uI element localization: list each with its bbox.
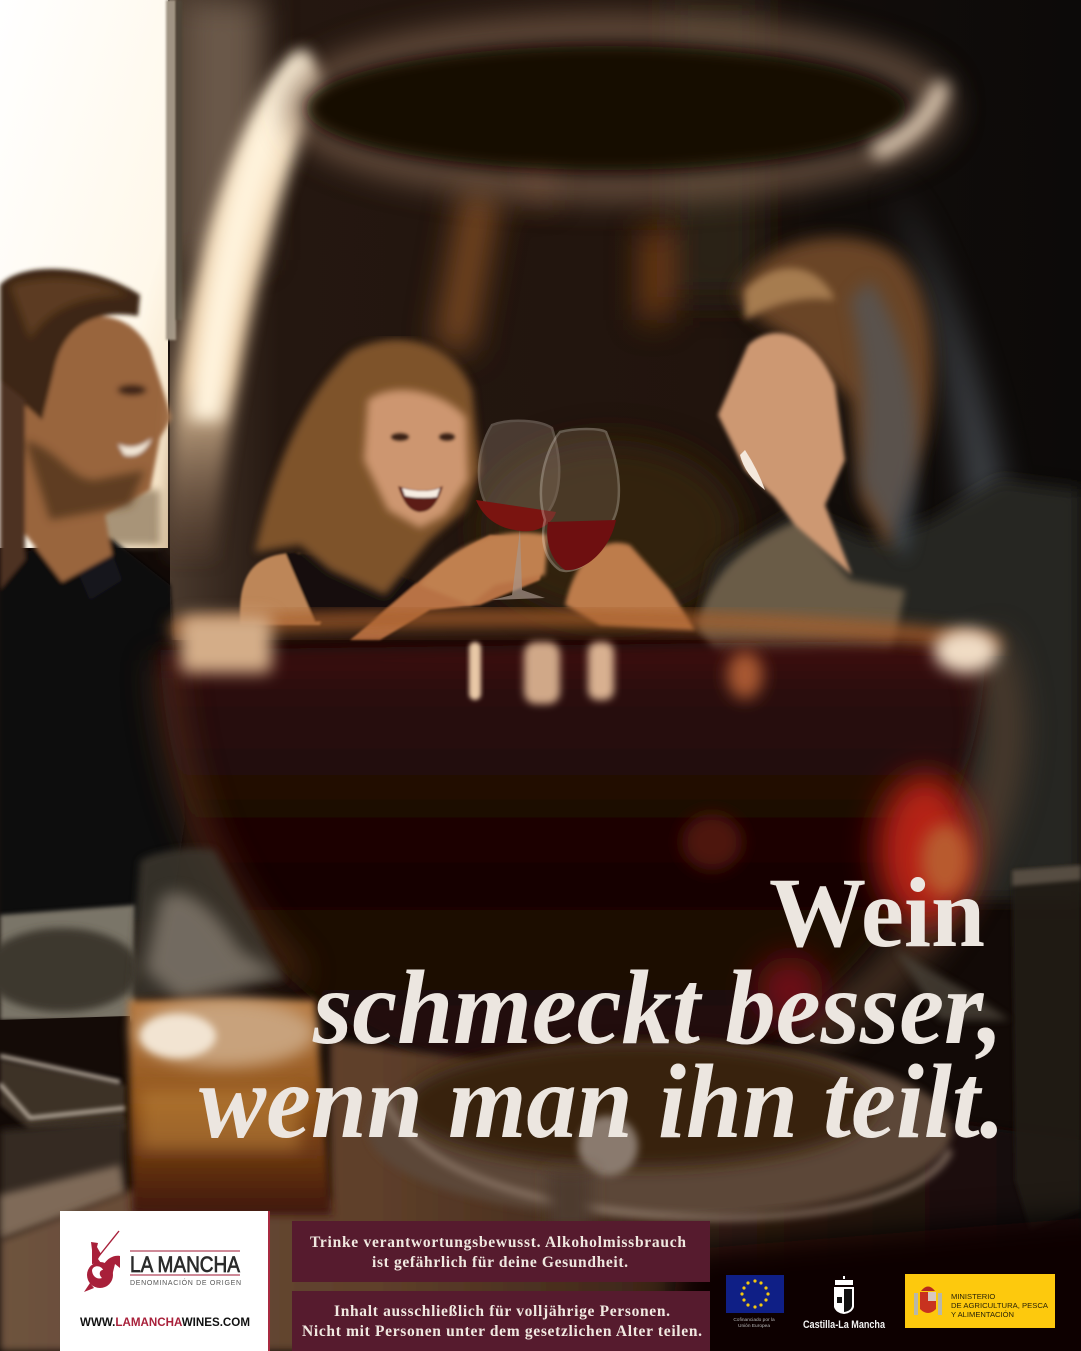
warning box: responsible drinking: ist gefährlich für deine Gesundheit. bbox=[372, 1254, 628, 1271]
headline: wenn man ihn teilt. bbox=[199, 1043, 1005, 1160]
headline bbox=[199, 857, 1005, 1160]
warning box: adults only: Nicht mit Personen unter dem gesetzlichen Alter teilen. bbox=[302, 1323, 702, 1340]
text: website: WWW.LAMANCHAWINES.COM bbox=[80, 1317, 250, 1329]
text: La Mancha wordmark: LA MANCHA bbox=[130, 1252, 240, 1277]
logo: Ministerio de Agricultura: MINISTERIO bbox=[951, 1292, 995, 1301]
footer shade bbox=[660, 1215, 1081, 1351]
large foreground wine glass bbox=[160, 615, 1006, 1076]
headline: schmeckt besser, bbox=[312, 949, 1003, 1066]
logo: European Union: Cofinanciado por la bbox=[733, 1317, 775, 1323]
headline: Wein bbox=[769, 857, 985, 968]
logo: Ministerio de Agricultura: Y ALIMENTACIÓN bbox=[951, 1310, 1014, 1319]
logo: Ministerio de Agricultura bbox=[905, 1274, 1055, 1328]
icon: rider on horse bbox=[84, 1231, 120, 1292]
man on the left bbox=[0, 269, 185, 920]
text: La Mancha wordmark bbox=[130, 1250, 241, 1287]
glass rim and left highlight bbox=[165, 30, 1025, 720]
warning box: adults only: Inhalt ausschließlich für volljährige Personen. bbox=[334, 1303, 670, 1320]
warning box: responsible drinking: Trinke verantwortungsbewusst. Alkoholmissbrauch bbox=[310, 1234, 686, 1251]
logo: European Union bbox=[726, 1275, 784, 1329]
woman in the centre bbox=[240, 340, 545, 640]
warning box: adults only bbox=[292, 1291, 710, 1351]
icon: Spanish coat of arms bbox=[914, 1286, 942, 1315]
panel: La Mancha logo bbox=[60, 1211, 270, 1351]
logo: Castilla-La Mancha bbox=[803, 1276, 886, 1331]
table, plates and tumbler bbox=[0, 848, 1081, 1351]
woman on the right bbox=[698, 237, 1081, 900]
warning box: responsible drinking bbox=[292, 1221, 710, 1282]
hands and toasting glasses bbox=[420, 421, 695, 630]
logo: European Union: Unión Europea bbox=[738, 1323, 770, 1329]
window bbox=[0, 0, 182, 548]
logo: Ministerio de Agricultura: DE AGRICULTURA, PESCA bbox=[951, 1301, 1049, 1310]
logo: Castilla-La Mancha: Castilla-La Mancha bbox=[803, 1319, 886, 1331]
text: La Mancha wordmark: DENOMINACIÓN DE ORIGEN bbox=[130, 1278, 241, 1287]
